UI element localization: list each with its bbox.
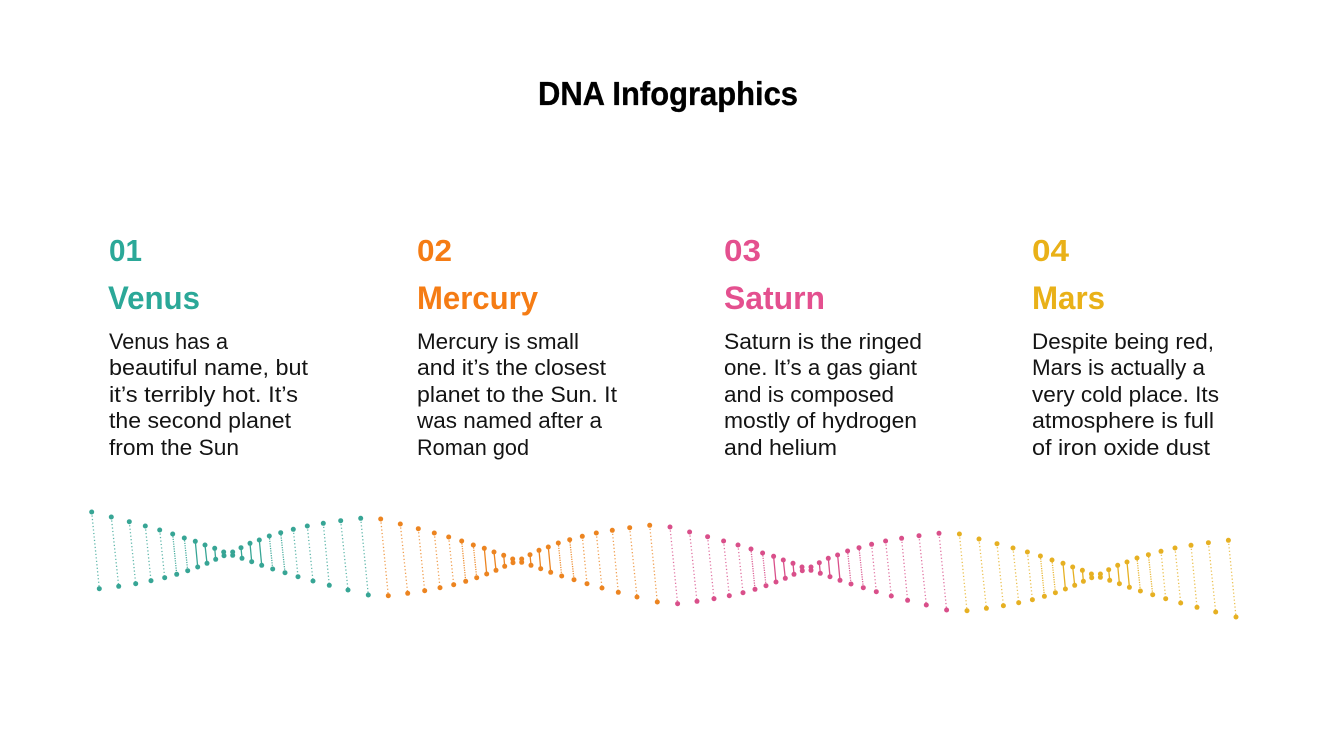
heading: Mars: Mars <box>1032 280 1105 316</box>
helix segment: orange <box>378 516 660 604</box>
number: 04: 04 <box>1032 233 1070 268</box>
chart: DNA helix strand <box>89 510 1239 620</box>
text block: Venus description: Venus has a <box>109 329 229 354</box>
text block: Saturn description: and helium <box>724 435 837 460</box>
text block: Saturn description: Saturn is the ringed <box>724 329 922 354</box>
text block: Saturn description: mostly of hydrogen <box>724 408 917 433</box>
text block: Mars description: atmosphere is full <box>1032 408 1214 433</box>
text block: Saturn description: one. It’s a gas giant <box>724 355 917 380</box>
helix segment: yellow <box>957 532 1238 620</box>
text block: Mercury description: planet to the Sun. It <box>417 382 617 407</box>
panel: Mars <box>1032 233 1219 460</box>
title: DNA Infographics <box>538 75 798 112</box>
heading: Venus: Venus <box>108 280 200 316</box>
text block: Mercury description: Roman god <box>417 435 529 460</box>
text block: Saturn description <box>724 329 922 460</box>
number: 03: 03 <box>724 233 761 268</box>
heading: Mercury: Mercury <box>417 280 538 316</box>
helix segment: pink <box>668 524 949 612</box>
text block: Mercury description: and it’s the closest <box>417 355 606 380</box>
panel: Venus <box>108 233 308 460</box>
text block: Mercury description: was named after a <box>416 408 603 433</box>
text block: Venus description: the second planet <box>109 408 291 433</box>
text block: Mars description: very cold place. Its <box>1032 382 1219 407</box>
number: 01: 01 <box>109 233 142 268</box>
panel: Mercury <box>416 233 617 460</box>
text block: Mars description: of iron oxide dust <box>1032 435 1210 460</box>
text block: Venus description: it’s terribly hot. It’s <box>109 382 298 407</box>
helix segment: teal <box>89 510 371 598</box>
text block: Venus description: from the Sun <box>109 435 239 460</box>
text block: Saturn description: and is composed <box>724 382 894 407</box>
panel: Saturn <box>724 233 922 460</box>
text block: Mercury description: Mercury is small <box>417 329 579 354</box>
text block: Venus description: beautiful name, but <box>109 355 308 380</box>
text block: Venus description <box>109 329 308 460</box>
text block: Mars description: Despite being red, <box>1032 329 1214 354</box>
text block: Mars description <box>1032 329 1219 460</box>
number: 02: 02 <box>417 233 452 268</box>
text block: Mars description: Mars is actually a <box>1032 355 1206 380</box>
heading: Saturn: Saturn <box>724 280 825 316</box>
text block: Mercury description <box>416 329 617 460</box>
